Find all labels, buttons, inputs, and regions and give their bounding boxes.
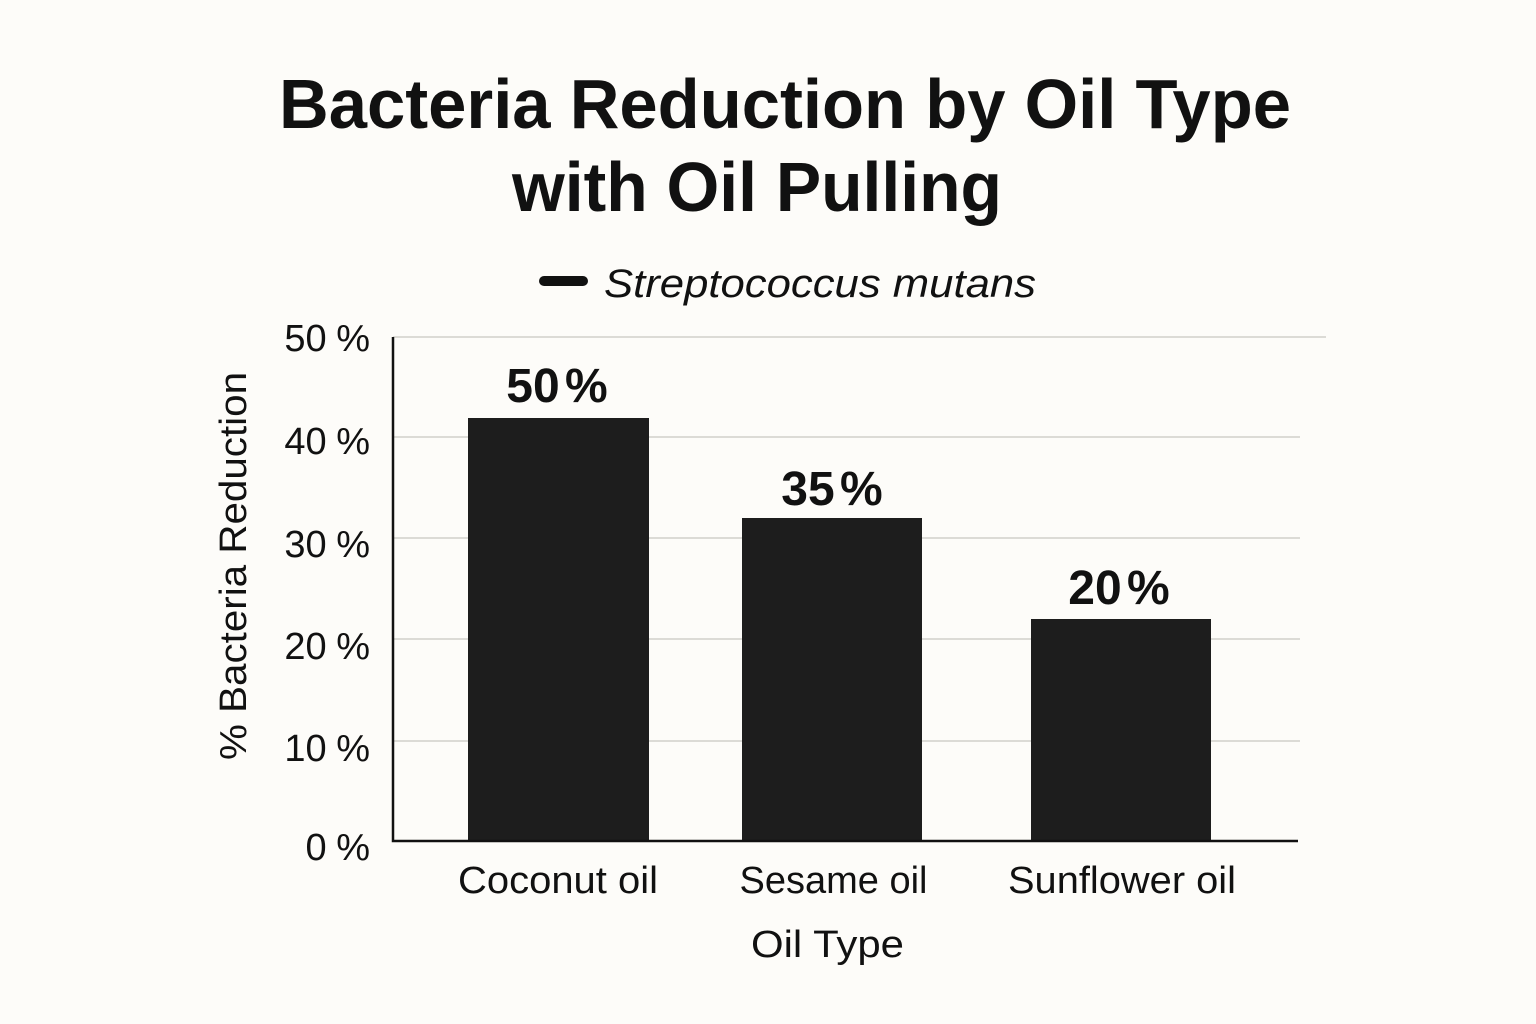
y axis tick labels: 20 % [284, 626, 370, 668]
y axis tick labels: 40 % [284, 421, 370, 463]
grid lines [393, 337, 1326, 741]
value labels [506, 360, 1170, 615]
y axis tick labels: 50 % [284, 318, 370, 360]
bar: sesame oil [742, 518, 922, 841]
bar: coconut oil [468, 418, 649, 841]
category labels: Sesame oil [740, 860, 928, 902]
title: Bacteria Reduction by Oil Type [279, 65, 1291, 143]
value labels: 35 % [781, 463, 883, 516]
category labels: Coconut oil [458, 860, 658, 902]
bar: sunflower oil [1031, 619, 1211, 841]
y axis tick labels [284, 318, 370, 869]
value labels: 20 % [1068, 562, 1170, 615]
y axis tick labels: 10 % [284, 728, 370, 770]
y axis title: % Bacteria Reduction [213, 372, 255, 760]
x axis title: Oil Type [751, 924, 904, 966]
y axis tick labels: 0 % [306, 827, 370, 869]
category labels: Sunflower oil [1008, 860, 1236, 902]
legend: Streptococcus mutans [604, 262, 1036, 306]
category labels [458, 860, 1236, 902]
title [279, 65, 1291, 226]
title: with Oil Pulling [511, 148, 1002, 226]
bar chart [468, 418, 1211, 841]
value labels: 50 % [506, 360, 608, 413]
y axis tick labels: 30 % [284, 524, 370, 566]
axes [393, 337, 1298, 841]
